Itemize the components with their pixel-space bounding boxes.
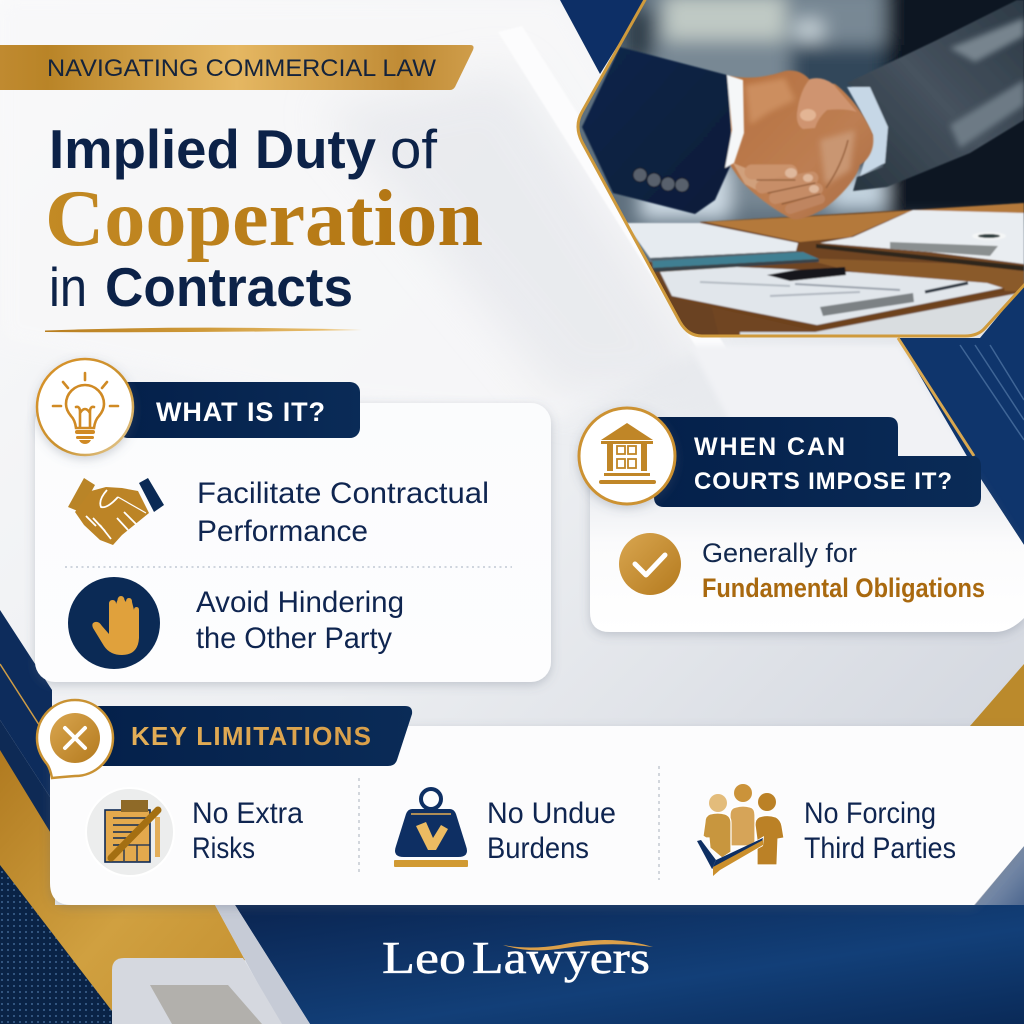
text: no forcing third parties: No Forcing: [804, 797, 936, 830]
left documents: [625, 223, 819, 272]
icon: handshake: [68, 478, 164, 545]
header pill: [118, 382, 360, 438]
icon: check mark: [619, 533, 681, 595]
right sleeve and cuff: [847, 0, 1024, 191]
item: no forcing third parties: [697, 784, 956, 876]
text: generally for fundamental obligations: Generally for: [702, 538, 857, 568]
banner: navigating commercial law: [0, 45, 474, 90]
left sleeve and cuff: [582, 47, 744, 214]
panel: when can courts impose it: [579, 408, 1024, 632]
panel card: [35, 403, 551, 682]
thumb: [797, 78, 857, 129]
text: no extra risks: Risks: [192, 832, 255, 865]
item: no extra risks: [86, 788, 303, 876]
title underline: [45, 328, 362, 332]
title: of: [390, 118, 438, 180]
text: facilitate contractual performance: Facilitate Contractual: [197, 477, 489, 510]
text: no forcing third parties: [804, 797, 956, 865]
header pill: [640, 417, 981, 507]
icon: weight: [394, 789, 468, 867]
icon: crossed clipboard: [86, 788, 174, 876]
logo: leo lawyers: [382, 932, 653, 983]
text: facilitate contractual performance: Performance: [197, 515, 368, 548]
banner: navigating commercial law: NAVIGATING COMMERCIAL LAW: [47, 55, 436, 82]
header pill: [80, 706, 412, 766]
logo: leo lawyers: Lawyers: [472, 932, 650, 983]
panel card: [590, 470, 1024, 632]
clasped hands: [730, 71, 873, 219]
icon: x badge: [37, 700, 113, 778]
header pill: WHAT IS IT?: [156, 397, 325, 427]
header pill: WHEN CAN: [694, 433, 845, 461]
text: generally for fundamental obligations: Fundamental Obligations: [702, 573, 985, 603]
title: in: [49, 256, 87, 318]
icon: stop hand: [68, 577, 160, 669]
title: Implied Duty: [49, 118, 376, 180]
title: Cooperation: [45, 175, 483, 263]
text: no extra risks: [192, 797, 303, 865]
icon: courthouse: [579, 408, 675, 504]
title: [45, 118, 483, 318]
text: no undue burdens: No Undue: [487, 797, 616, 830]
text: avoid hindering the other party: Avoid Hindering: [196, 586, 404, 619]
text: no undue burdens: Burdens: [487, 832, 589, 865]
text: avoid hindering the other party: the Other Party: [196, 622, 392, 655]
right documents: [816, 210, 1024, 271]
photo: handshake over contract documents: [570, 0, 1024, 340]
panel: key limitations: [37, 700, 1024, 905]
text: no extra risks: No Extra: [192, 797, 303, 830]
text: avoid hindering the other party: [196, 586, 404, 655]
text: facilitate contractual performance: [197, 477, 489, 548]
panel: what is it: [35, 359, 551, 682]
header pill: KEY LIMITATIONS: [131, 721, 371, 751]
title: Contracts: [105, 256, 353, 318]
header pill: COURTS IMPOSE IT?: [694, 468, 952, 495]
fingers of the lower hand: [752, 172, 820, 209]
front contract with pen: [660, 267, 1003, 325]
panel card: [50, 726, 1024, 905]
text: no undue burdens: [487, 797, 616, 865]
icon: light bulb: [37, 359, 133, 455]
text: no forcing third parties: Third Parties: [804, 832, 956, 865]
logo: leo lawyers: Leo: [382, 932, 466, 983]
icon: people with check: [697, 784, 784, 876]
item: no undue burdens: [394, 789, 616, 867]
text: generally for fundamental obligations: [702, 538, 985, 603]
